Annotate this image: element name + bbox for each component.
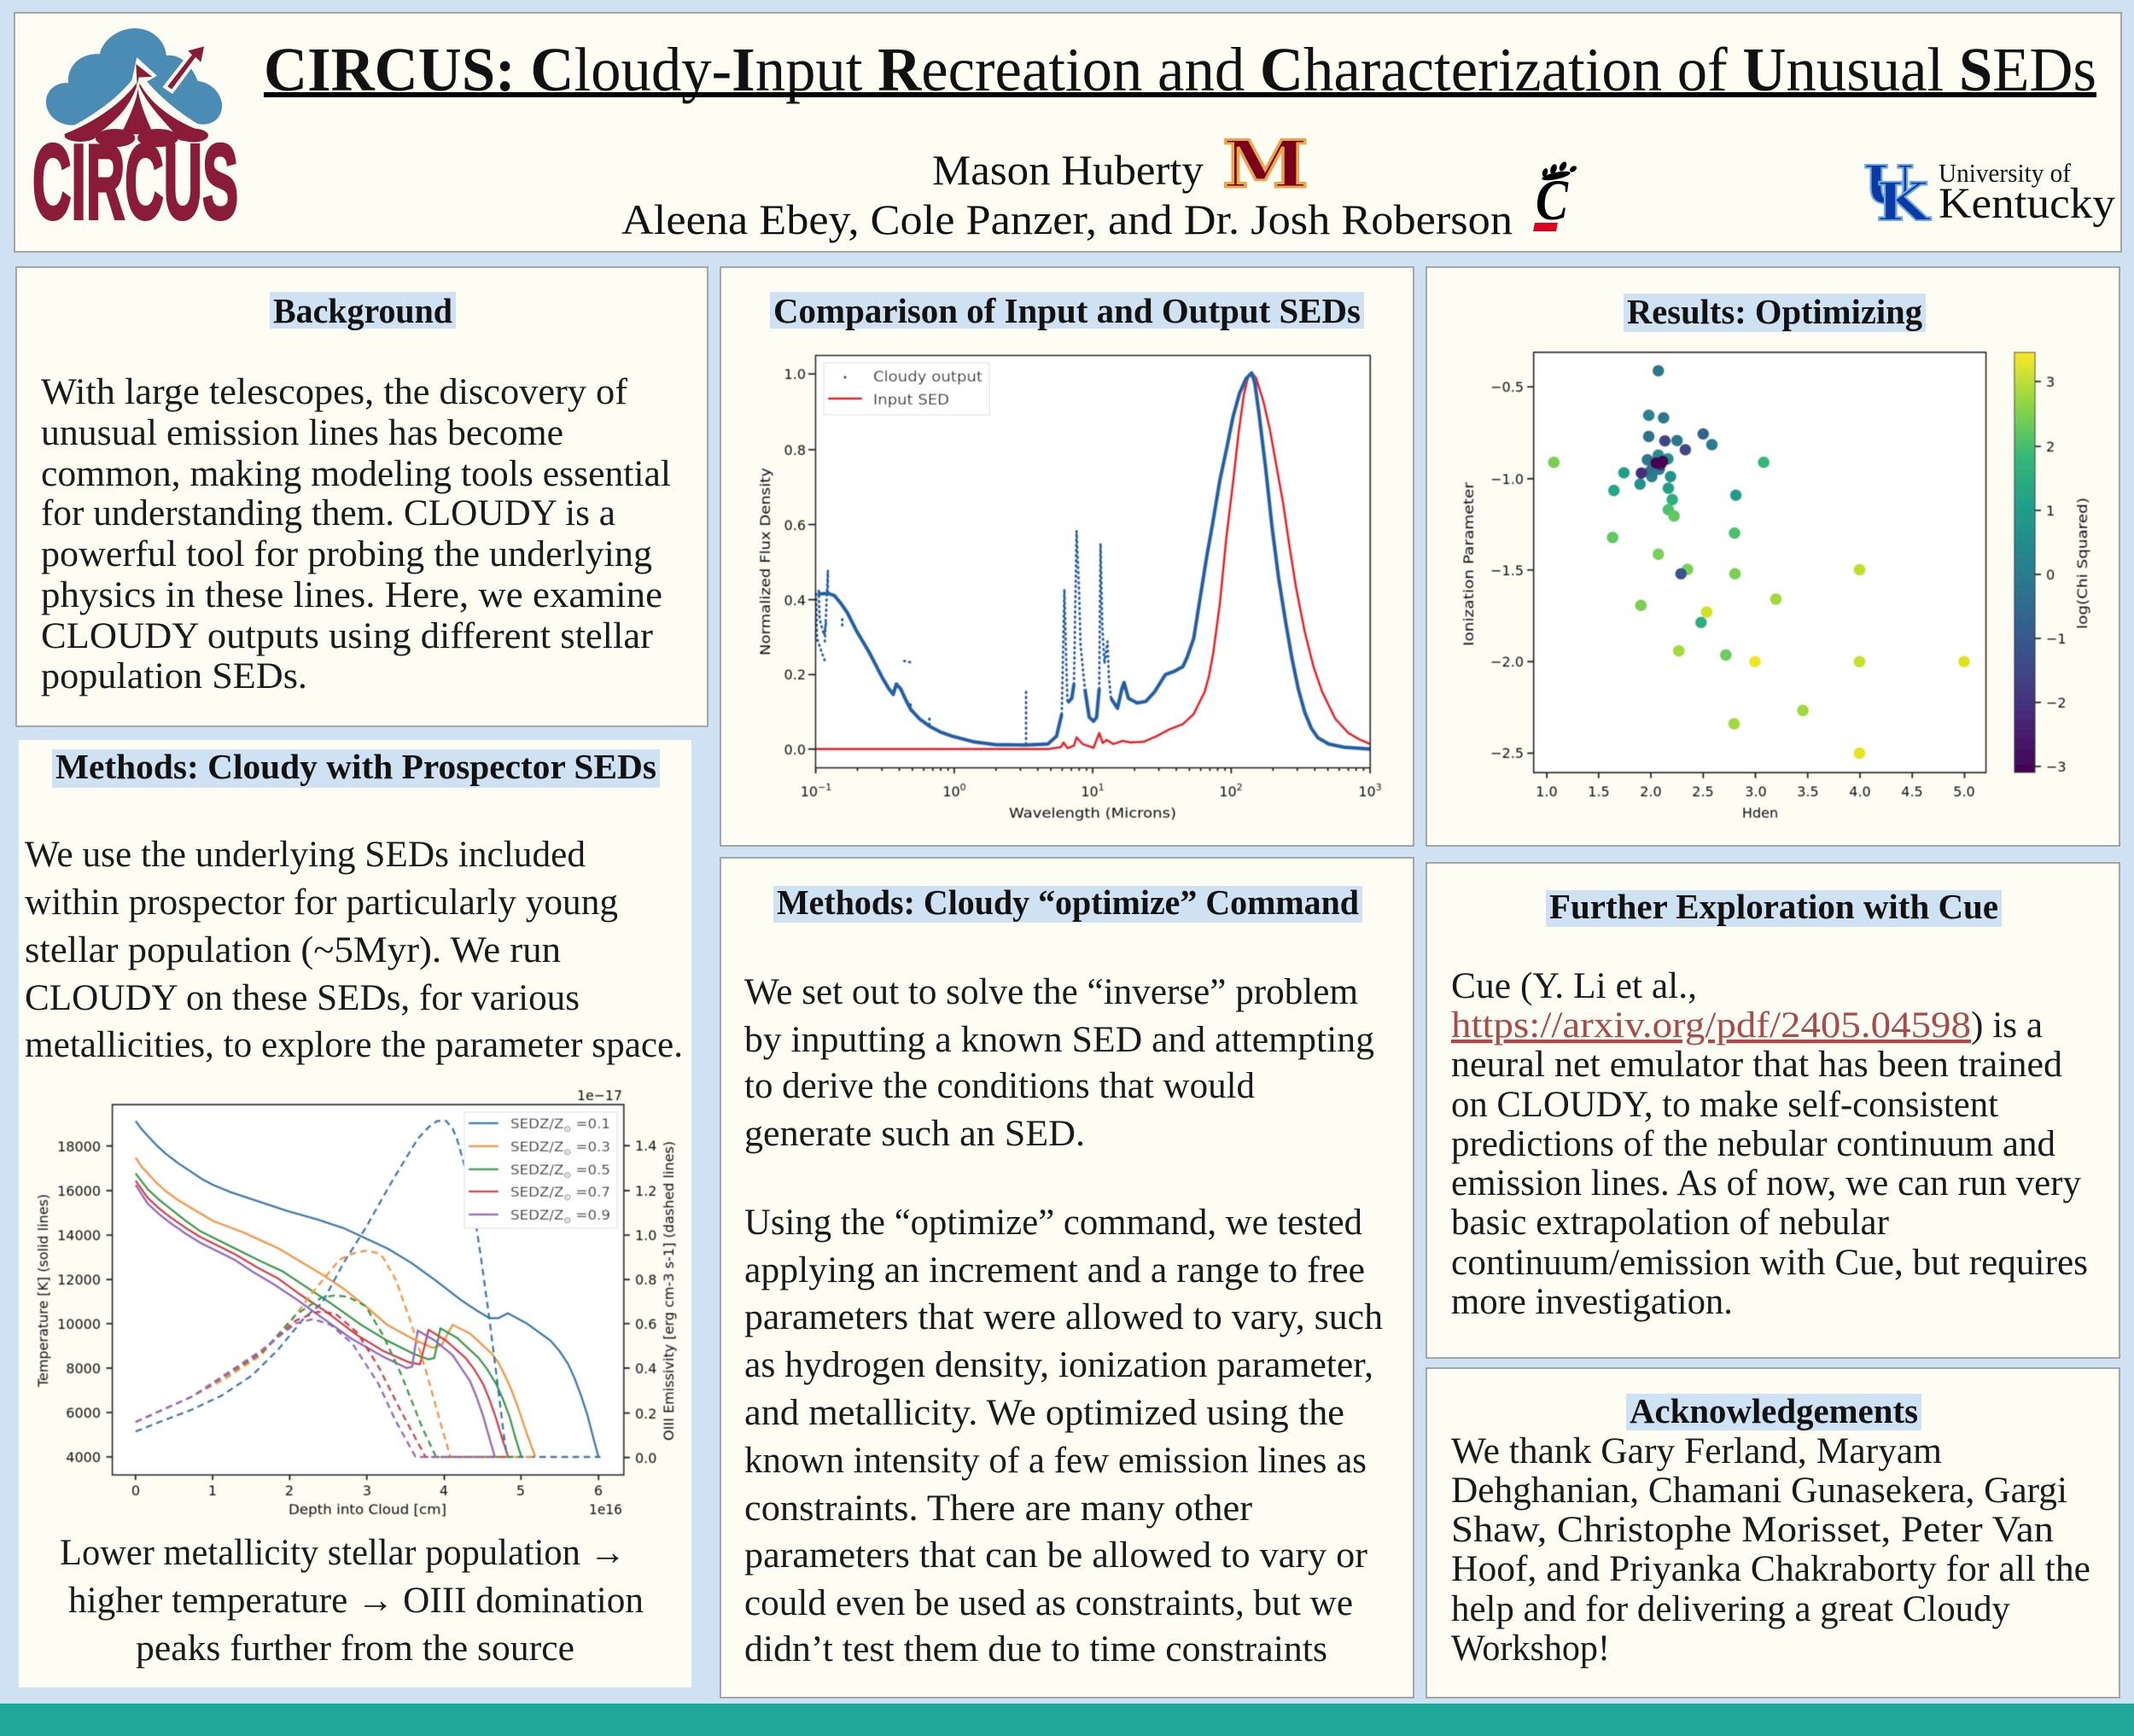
legend: metallicity: SEDZ/Z [510, 1139, 562, 1155]
chart: input and output SED: 0.6 [784, 517, 806, 533]
chart: temperature and OIII emissivity vs depth: 10000 [57, 1316, 101, 1332]
chart: temperature and OIII emissivity vs depth: 6 [594, 1483, 603, 1499]
text: optimize body [744, 972, 1383, 1669]
text: cue body: more investigation. [1451, 1282, 1733, 1322]
text: cue body: https://arxiv.org/pdf/2405.04598 [1451, 1005, 1971, 1046]
footer bar [0, 1704, 2134, 1736]
chart: temperature and OIII emissivity vs depth: 16000 [57, 1183, 101, 1199]
logo: Minnesota M: M [1222, 126, 1309, 202]
panel: further exploration with cue [1426, 863, 2119, 1358]
text: background body: CLOUDY outputs using different stellar [41, 616, 653, 656]
chart: input and output SED: 0.8 [784, 442, 806, 458]
chart: temperature and OIII emissivity vs depth: 0.6 [635, 1316, 656, 1332]
chart: temperature and OIII emissivity vs depth: 1.2 [635, 1183, 656, 1199]
chart: hden vs ionization scatter: −2.0 [1490, 654, 1524, 670]
chart: temperature and OIII emissivity vs depth: 6000 [66, 1405, 101, 1421]
chart: temperature and OIII emissivity vs depth: 8000 [66, 1360, 101, 1377]
caption: metallicity result: Lower metallicity stellar population → [60, 1533, 626, 1573]
caption: metallicity result [60, 1533, 644, 1669]
chart: temperature and OIII emissivity vs depth: 1.0 [635, 1227, 656, 1244]
legend: SED: Input SED [873, 392, 949, 409]
legend: metallicity: SEDZ/Z [510, 1162, 562, 1178]
chart: hden vs ionization scatter: Hden [1742, 805, 1778, 821]
text: acknowledgements body: We thank Gary Ferland, Maryam [1451, 1431, 1942, 1471]
chart: hden vs ionization scatter: 4.5 [1901, 784, 1923, 800]
legend: metallicity: =0.1 [571, 1116, 610, 1132]
chart: input and output SED: 1.0 [784, 366, 806, 382]
colorbar: log chi squared: −2 [2046, 695, 2067, 711]
text: acknowledgements body: Dehghanian, Chamani Gunasekera, Gargi [1451, 1471, 2067, 1511]
chart: hden vs ionization scatter [1461, 352, 2090, 821]
heading: further exploration: Further Exploration with Cue [1549, 887, 1998, 926]
chart: temperature and OIII emissivity vs depth: 0.2 [635, 1406, 656, 1422]
legend: metallicity: ⊙ [563, 1171, 571, 1180]
text: optimize body: generate such an SED. [744, 1114, 1085, 1154]
chart: input and output SED: 0.0 [784, 742, 806, 758]
text: cue body: Cue (Y. Li et al., [1451, 966, 1697, 1006]
text: acknowledgements body: help and for delivering a great Cloudy [1451, 1589, 2010, 1629]
chart: input and output SED: 1 [1099, 782, 1105, 793]
logo: Cincinnati C and paw: C [1536, 167, 1569, 232]
logo: CIRCUS: CIRCUS [32, 124, 238, 242]
chart: temperature and OIII emissivity vs depth: 4 [440, 1483, 448, 1499]
text: optimize body: and metallicity. We optimized using the [744, 1393, 1344, 1433]
panel: results optimizing [1426, 267, 2119, 846]
panel: acknowledgements [1426, 1368, 2119, 1698]
title: CIRCUS: Cloudy-Input Recreation and Characterization of Unusual SEDs [264, 35, 2096, 104]
text: optimize body: parameters that were allowed to vary, such [744, 1297, 1383, 1337]
legend: metallicity: =0.9 [571, 1207, 610, 1223]
chart: input and output SED: 10 [942, 784, 960, 800]
chart: temperature and OIII emissivity vs depth: OIII Emissivity [erg cm-3 s-1] (dashed lines) [661, 1141, 677, 1441]
text: optimize body: We set out to solve the “inverse” problem [744, 972, 1358, 1012]
text: cue body [1451, 966, 2088, 1322]
legend: SED [824, 363, 989, 415]
chart: input and output SED: 10 [801, 784, 818, 800]
chart: input and output SED [757, 356, 1382, 821]
legend: metallicity: SEDZ/Z [510, 1207, 562, 1223]
text: acknowledgements body [1451, 1431, 2090, 1669]
chart: temperature and OIII emissivity vs depth: 12000 [57, 1272, 101, 1288]
caption: metallicity result: peaks further from the source [136, 1628, 574, 1669]
text: optimize body: parameters that can be allowed to vary or [744, 1535, 1367, 1576]
chart: input and output SED: 3 [1376, 782, 1382, 793]
text: prospector body [25, 835, 683, 1065]
logo: University of Kentucky: Kentucky [1939, 180, 2116, 228]
text: acknowledgements body: Hoof, and Priyanka Chakraborty for all the [1451, 1549, 2090, 1589]
heading: methods prospector: Methods: Cloudy with Prospector SEDs [55, 747, 656, 786]
chart: hden vs ionization scatter: 1.0 [1536, 784, 1558, 800]
authors: Mason Huberty [932, 146, 1204, 194]
text: background body: powerful tool for probing the underlying [41, 534, 652, 574]
chart: input and output SED: 0 [960, 782, 966, 793]
chart: input and output SED: −1 [818, 782, 831, 793]
chart: hden vs ionization scatter: −1.5 [1490, 562, 1524, 579]
chart: hden vs ionization scatter: 3.5 [1797, 784, 1819, 800]
panel: methods optimize command [720, 858, 1414, 1698]
legend: metallicity: =0.3 [571, 1139, 610, 1155]
logo: CIRCUS [32, 28, 238, 242]
legend: metallicity: ⊙ [563, 1193, 571, 1203]
text: background body: With large telescopes, the discovery of [41, 372, 628, 412]
heading: acknowledgements: Acknowledgements [1630, 1391, 1918, 1430]
heading: comparison: Comparison of Input and Output SEDs [773, 291, 1361, 330]
legend: metallicity: SEDZ/Z [510, 1116, 562, 1132]
caption: metallicity result: higher temperature → OIII domination [68, 1581, 644, 1621]
text: prospector body: metallicities, to explore the parameter space. [25, 1025, 683, 1065]
chart: temperature and OIII emissivity vs depth: 0 [131, 1483, 140, 1499]
logo: University of Kentucky: K [1876, 171, 1931, 233]
panel: background [16, 267, 708, 726]
text: cue body: neural net emulator that has been trained [1451, 1045, 2062, 1085]
chart: input and output SED: 10 [1358, 784, 1376, 800]
text: cue body: ) is a [1971, 1005, 2043, 1046]
chart: temperature and OIII emissivity vs depth: Depth into Cloud [cm] [289, 1501, 446, 1518]
text: prospector body: within prospector for particularly young [25, 883, 618, 923]
chart: temperature and OIII emissivity vs depth: 5 [516, 1483, 525, 1499]
chart: temperature and OIII emissivity vs depth: 14000 [57, 1227, 101, 1244]
colorbar: log chi squared: −3 [2046, 759, 2067, 775]
heading: optimize: Methods: Cloudy “optimize” Command [777, 883, 1359, 922]
text: optimize body: didn’t test them due to time constraints [744, 1629, 1327, 1669]
text: prospector body: We use the underlying SEDs included [25, 835, 586, 875]
logo: University of Kentucky: University of [1939, 158, 2072, 188]
text: optimize body: constraints. There are many other [744, 1488, 1252, 1529]
text: acknowledgements body: Shaw, Christophe Morisset, Peter Van [1451, 1510, 2054, 1550]
chart: temperature and OIII emissivity vs depth: 3 [363, 1483, 371, 1499]
chart: input and output SED: 0.2 [784, 667, 806, 683]
header panel [15, 13, 2121, 252]
heading: results: Results: Optimizing [1627, 292, 1922, 331]
colorbar: log chi squared: 3 [2046, 374, 2055, 390]
chart: temperature and OIII emissivity vs depth: 1 [208, 1483, 217, 1499]
chart: hden vs ionization scatter: 1.5 [1588, 784, 1610, 800]
text: background body: population SEDs. [41, 656, 307, 696]
text: background body: unusual emission lines has become [41, 413, 563, 453]
chart: input and output SED: 2 [1237, 782, 1243, 793]
legend: metallicity: ⊙ [563, 1125, 571, 1134]
text: optimize body: by inputting a known SED and attempting [744, 1020, 1374, 1060]
colorbar: log chi squared: 2 [2046, 439, 2055, 455]
panel: comparison of SEDs [720, 267, 1414, 846]
chart: temperature and OIII emissivity vs depth: 2 [285, 1483, 294, 1499]
text: optimize body: to derive the conditions that would [744, 1066, 1255, 1106]
chart: hden vs ionization scatter: 3.0 [1745, 784, 1767, 800]
chart: input and output SED: 10 [1081, 784, 1099, 800]
logo: University of Kentucky: U [1863, 154, 1914, 216]
text: optimize body: as hydrogen density, ionization parameter, [744, 1345, 1373, 1385]
text: optimize body: Using the “optimize” command, we tested [744, 1203, 1362, 1243]
text: background body: common, making modeling tools essential [41, 454, 671, 494]
text: prospector body: CLOUDY on these SEDs, for various [25, 978, 580, 1018]
legend: metallicity: SEDZ/Z [510, 1184, 562, 1200]
text: optimize body: applying an increment and a range to free [744, 1250, 1365, 1290]
authors [621, 146, 1513, 243]
text: cue body: on CLOUDY, to make self-consistent [1451, 1085, 1998, 1125]
legend: metallicity: =0.5 [571, 1162, 610, 1178]
authors: Aleena Ebey, Cole Panzer, and Dr. Josh Roberson [621, 195, 1513, 243]
colorbar: log chi squared: 1 [2046, 503, 2055, 519]
colorbar: log chi squared: −1 [2046, 631, 2067, 647]
legend: SED: Cloudy output [873, 369, 982, 386]
chart: temperature and OIII emissivity vs depth: Temperature [K] (solid lines) [35, 1194, 51, 1388]
colorbar: log chi squared [2014, 352, 2090, 775]
chart: hden vs ionization scatter: 2.5 [1692, 784, 1714, 800]
panel: methods with prospector [19, 740, 691, 1687]
legend: metallicity: =0.7 [571, 1184, 610, 1200]
text: prospector body: stellar population (~5Myr). We run [25, 930, 561, 970]
text: cue body: predictions of the nebular continuum and [1451, 1124, 2055, 1164]
colorbar: log chi squared: log(Chi Squared) [2074, 498, 2090, 629]
chart: hden vs ionization scatter: −1.0 [1490, 471, 1524, 487]
chart: hden vs ionization scatter: 2.0 [1640, 784, 1662, 800]
legend: metallicity: ⊙ [563, 1216, 571, 1226]
chart: temperature and OIII emissivity vs depth: 1.4 [635, 1138, 656, 1154]
legend: metallicity [464, 1112, 617, 1228]
chart: hden vs ionization scatter: −0.5 [1490, 379, 1524, 395]
chart: input and output SED: 10 [1219, 784, 1237, 800]
text: optimize body: known intensity of a few emission lines as [744, 1441, 1367, 1481]
chart: input and output SED: Wavelength (Microns) [1009, 805, 1176, 821]
chart: temperature and OIII emissivity vs depth: 0.0 [635, 1450, 656, 1466]
chart: temperature and OIII emissivity vs depth: 1e−17 [577, 1087, 622, 1104]
text: background body [41, 372, 671, 696]
text: background body: for understanding them. CLOUDY is a [41, 493, 615, 533]
legend: metallicity: ⊙ [563, 1148, 571, 1157]
chart: temperature and OIII emissivity vs depth: 0.4 [635, 1360, 656, 1377]
chart: hden vs ionization scatter: 5.0 [1953, 784, 1975, 800]
text: cue body: basic extrapolation of nebular [1451, 1203, 1889, 1243]
colorbar: log chi squared: 0 [2046, 567, 2055, 583]
text: optimize body: could even be used as constraints, but we [744, 1583, 1353, 1623]
text: cue body: continuum/emission with Cue, but requires [1451, 1243, 2088, 1283]
chart: temperature and OIII emissivity vs depth [35, 1087, 677, 1518]
chart: temperature and OIII emissivity vs depth: 18000 [57, 1139, 101, 1155]
chart: input and output SED: Normalized Flux Density [757, 468, 773, 655]
logo: University of Kentucky [1863, 154, 2116, 233]
chart: hden vs ionization scatter: 4.0 [1849, 784, 1871, 800]
text: acknowledgements body: Workshop! [1451, 1628, 1610, 1669]
chart: temperature and OIII emissivity vs depth: 4000 [66, 1449, 101, 1465]
chart: hden vs ionization scatter: Ionization Parameter [1461, 482, 1477, 646]
heading: background: Background [273, 291, 452, 330]
text: background body: physics in these lines. Here, we examine [41, 575, 662, 615]
chart: input and output SED: 0.4 [784, 592, 806, 609]
chart: hden vs ionization scatter: −2.5 [1490, 745, 1524, 761]
chart: temperature and OIII emissivity vs depth: 1e16 [589, 1501, 622, 1518]
chart: temperature and OIII emissivity vs depth: 0.8 [635, 1272, 656, 1288]
text: cue body: emission lines. As of now, we can run very [1451, 1163, 2081, 1203]
